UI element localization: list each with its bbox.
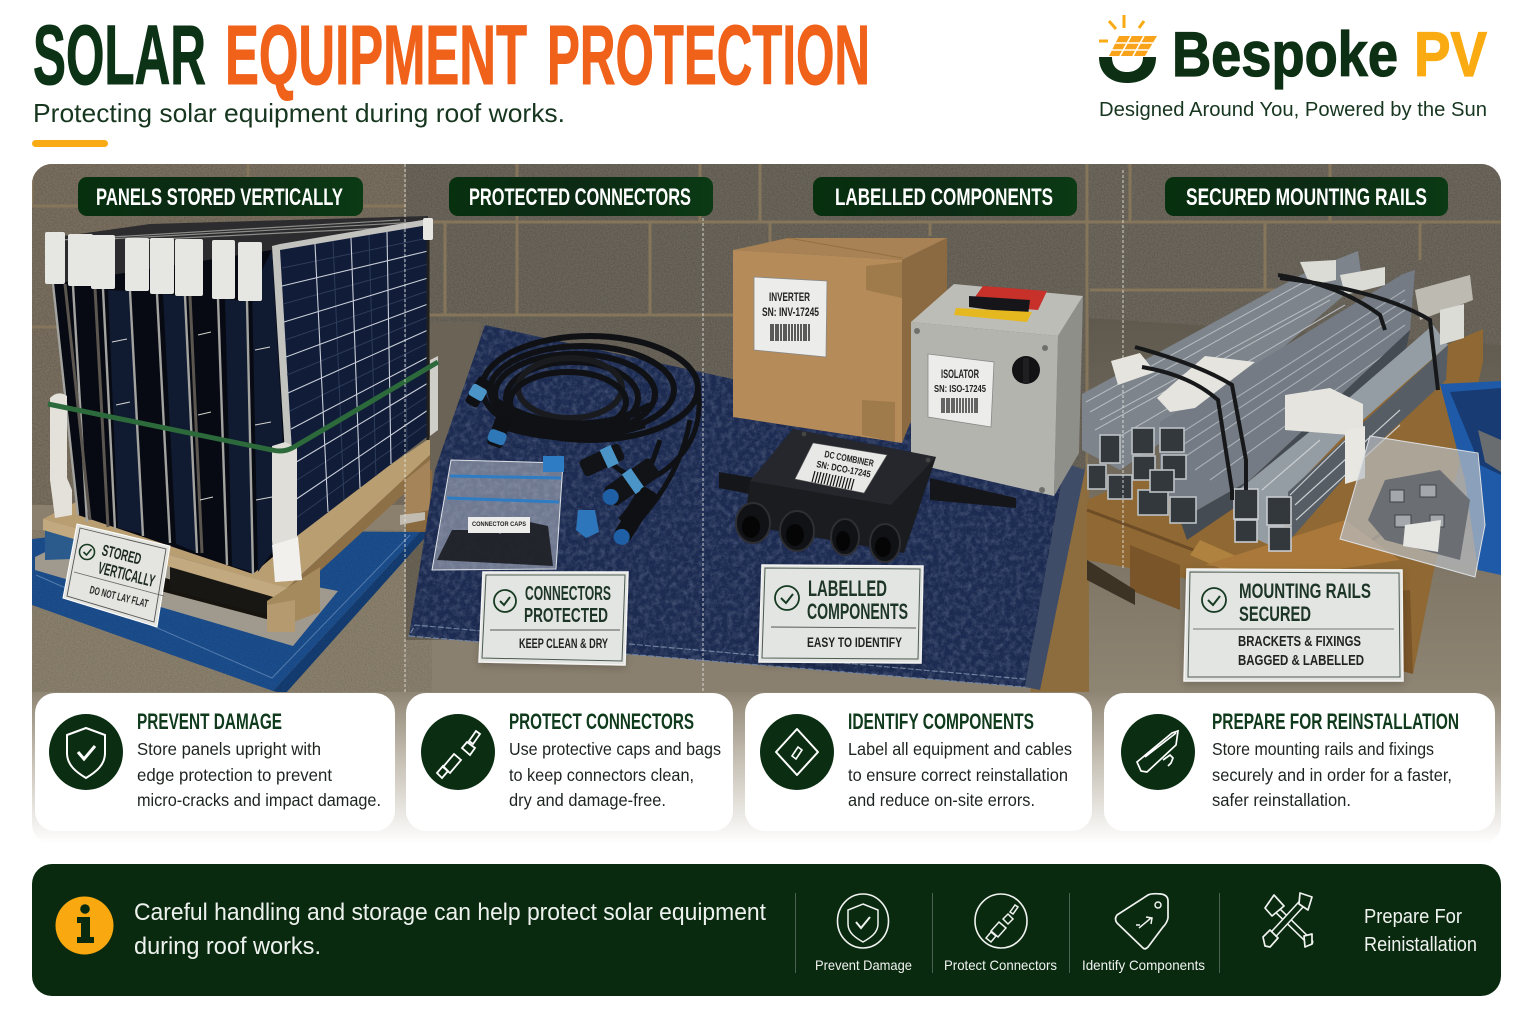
card text: and reduce on-site errors. xyxy=(848,790,1035,810)
combiner label: SN: DCO-17245 xyxy=(815,459,872,481)
banner item: protect connectors xyxy=(944,894,1057,973)
card text: dry and damage-free. xyxy=(509,790,666,810)
blue dust cap xyxy=(576,510,599,538)
icon: crossed wrenches xyxy=(1263,893,1312,947)
card: protect connectors xyxy=(406,693,733,831)
heading pill: protected connectors: PROTECTED CONNECTORS xyxy=(469,184,691,211)
sign: stored vertically: STORED xyxy=(100,542,143,569)
DC combiner box xyxy=(719,429,1016,562)
card heading: IDENTIFY COMPONENTS xyxy=(848,709,1034,734)
connector xyxy=(614,487,656,545)
wooden pallet under rails xyxy=(1087,329,1483,674)
logo wordmark: Bespoke xyxy=(1172,20,1398,90)
logo: Bespoke PV xyxy=(1099,15,1487,121)
isolator label xyxy=(928,354,994,427)
heading pill: labelled components: LABELLED COMPONENTS xyxy=(835,184,1053,211)
bundle back-left xyxy=(1082,251,1362,470)
combiner label: DC COMBINER xyxy=(823,449,875,470)
card: identify components xyxy=(745,693,1092,831)
panel seams xyxy=(405,164,1123,692)
icon: label tag xyxy=(760,714,834,790)
icon: info xyxy=(56,896,114,954)
inverter label xyxy=(754,277,827,357)
banner item: prepare for reinstallation: Prepare For xyxy=(1364,906,1462,928)
wall backdrop xyxy=(32,164,1501,640)
black straps xyxy=(1135,275,1438,500)
title xyxy=(33,8,870,102)
banner message xyxy=(134,899,766,960)
card text: edge protection to prevent xyxy=(137,765,332,785)
heading pill: protected connectors xyxy=(449,177,713,216)
bundle front-right xyxy=(1237,325,1448,550)
coiled cables and connectors xyxy=(464,336,699,548)
logo icon xyxy=(1099,15,1157,83)
stack top edges xyxy=(65,216,428,282)
mounting rail bundles xyxy=(1082,251,1473,551)
cable glands xyxy=(736,503,900,562)
accent underline xyxy=(32,140,108,147)
heading pill: panels stored vertically xyxy=(78,177,363,216)
card text: Store mounting rails and fixings xyxy=(1212,739,1434,759)
inverter label: SN: INV-17245 xyxy=(762,307,819,319)
cardboard inverter box xyxy=(733,238,947,443)
inverter label: INVERTER xyxy=(769,290,810,304)
card text: to ensure correct reinstallation xyxy=(848,765,1068,785)
card text: Label all equipment and cables xyxy=(848,739,1072,759)
connector xyxy=(466,376,489,408)
zip bag of connector caps: CONNECTOR CAPS xyxy=(472,522,526,528)
isolator knob xyxy=(1012,356,1040,384)
heading pill: panels stored vertically: PANELS STORED VERTICALLY xyxy=(96,184,343,211)
card text xyxy=(1212,739,1452,810)
combiner label xyxy=(795,443,887,493)
logo PV: PV xyxy=(1414,20,1487,90)
banner message: during roof works. xyxy=(134,933,321,960)
fade to white under cards xyxy=(32,692,1501,844)
floor xyxy=(32,318,1501,695)
side slats xyxy=(53,250,297,574)
sign: mounting rails secured: MOUNTING RAILS xyxy=(1239,580,1371,603)
card heading: PROTECT CONNECTORS xyxy=(509,709,694,734)
isolator label: SN: ISO-17245 xyxy=(934,383,986,395)
icon: rail xyxy=(1121,714,1195,790)
card: prepare for reinstallation xyxy=(1104,693,1495,831)
sign: labelled components xyxy=(759,565,923,663)
logo tagline: Designed Around You, Powered by the Sun xyxy=(1099,98,1487,121)
sign: mounting rails secured: SECURED xyxy=(1239,603,1311,626)
bottom banner xyxy=(32,864,1501,996)
sign: connectors protected: KEEP CLEAN & DRY xyxy=(519,636,608,651)
sign: stored vertically: DO NOT LAY FLAT xyxy=(88,584,150,610)
sign: connectors protected xyxy=(479,572,628,665)
concrete slab and pallet xyxy=(35,438,430,646)
card: prevent damage xyxy=(35,693,395,831)
card heading: PREVENT DAMAGE xyxy=(137,709,282,734)
banner item: protect connectors: Protect Connectors xyxy=(944,957,1057,973)
bag of brackets and fixings xyxy=(1340,436,1485,577)
card text xyxy=(509,739,721,810)
connector xyxy=(487,418,508,448)
card text: Use protective caps and bags xyxy=(509,739,721,759)
white corner clips xyxy=(45,218,433,301)
banner item: prevent damage xyxy=(815,894,912,973)
bundle middle xyxy=(1160,270,1415,520)
sign: mounting rails secured: BAGGED & LABELLED xyxy=(1238,652,1364,669)
heading pill: secured mounting rails: SECURED MOUNTING RAILS xyxy=(1186,184,1427,211)
sign: mounting rails secured xyxy=(1184,569,1403,681)
grey isolator enclosure xyxy=(911,284,1083,496)
sign: stored vertically xyxy=(63,524,170,627)
card text: safer reinstallation. xyxy=(1212,790,1351,810)
isolator label: ISOLATOR xyxy=(941,369,979,381)
title: SOLAR xyxy=(33,8,206,102)
title: PROTECTION xyxy=(547,8,870,102)
banner item: identify components: Identify Components xyxy=(1082,957,1205,973)
sign: stored vertically: VERTICALLY xyxy=(96,558,157,591)
zip bag of connector caps xyxy=(432,456,564,570)
profile ends, right group xyxy=(1234,489,1291,551)
sign: labelled components: COMPONENTS xyxy=(807,599,908,624)
heading pill: labelled components xyxy=(813,177,1077,216)
blue floor mat, panel 1 xyxy=(32,530,432,695)
banner item: prepare for reinstallation: Reinistallation xyxy=(1364,934,1477,956)
blue storage crate xyxy=(1440,381,1501,575)
edge posts xyxy=(50,393,72,518)
far end brackets xyxy=(1415,275,1473,320)
photo strip xyxy=(32,164,1501,844)
card text: to keep connectors clean, xyxy=(509,765,694,785)
icon: shield xyxy=(49,714,123,790)
profile ends, left group xyxy=(1088,428,1196,523)
large front panel xyxy=(272,219,428,540)
sign: connectors protected: CONNECTORS xyxy=(525,583,611,605)
card text: Store panels upright with xyxy=(137,739,321,759)
banner item: prepare for reinstallation xyxy=(1263,893,1477,956)
banner message: Careful handling and storage can help protect solar equipment xyxy=(134,899,766,926)
banner item: prevent damage: Prevent Damage xyxy=(815,957,912,973)
heading pill: secured mounting rails xyxy=(1165,177,1448,216)
card text: micro-cracks and impact damage. xyxy=(137,790,381,810)
card text: securely and in order for a faster, xyxy=(1212,765,1452,785)
card text xyxy=(137,739,381,810)
sign: mounting rails secured: BRACKETS & FIXINGS xyxy=(1238,633,1361,650)
green strap xyxy=(48,362,438,451)
stored solar panels xyxy=(45,216,438,582)
connector xyxy=(580,444,624,476)
sign: labelled components: LABELLED xyxy=(808,576,887,601)
icon: connector xyxy=(421,714,495,790)
sign: labelled components: EASY TO IDENTIFY xyxy=(807,634,902,650)
navy moving blanket, panels 2-3 xyxy=(405,320,1085,690)
title: EQUIPMENT xyxy=(225,8,527,102)
sign: connectors protected: PROTECTED xyxy=(524,605,608,627)
white end protectors xyxy=(1111,353,1363,436)
subtitle: Protecting solar equipment during roof works. xyxy=(33,98,565,128)
connector xyxy=(602,458,659,506)
card text xyxy=(848,739,1072,810)
banner item: identify components xyxy=(1082,894,1205,973)
